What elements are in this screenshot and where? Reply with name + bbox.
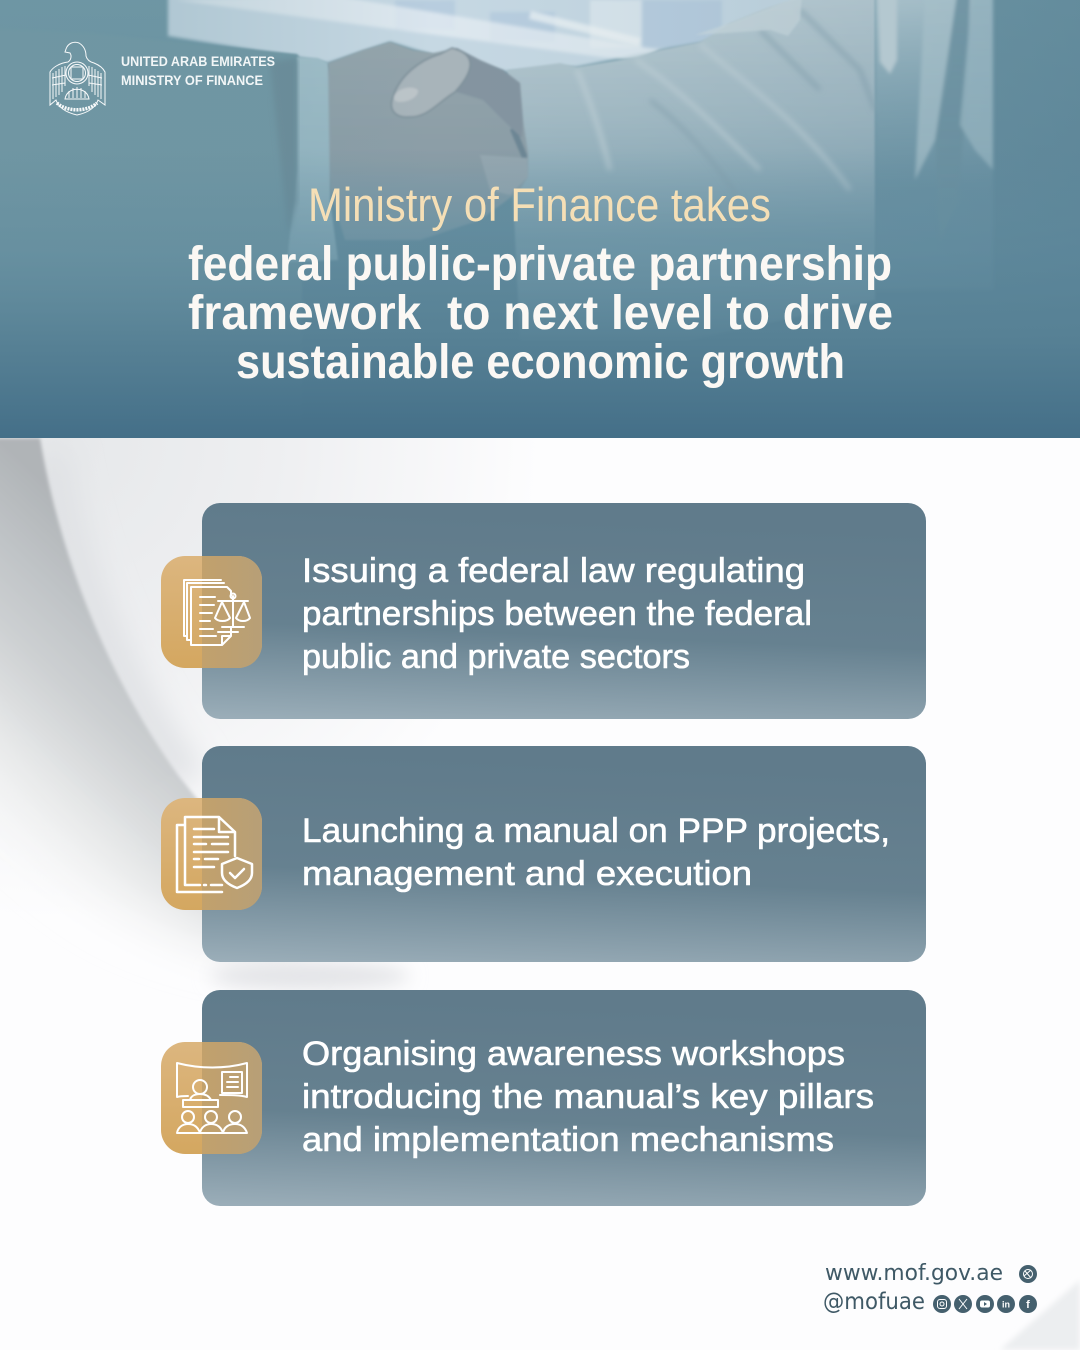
footer: website and handle: www.mof.gov.ae [825, 1261, 1003, 1286]
title: federal public-private partnership [188, 238, 892, 291]
panel: federal law [202, 503, 926, 719]
text: federal law: partnerships between the federal [302, 595, 812, 633]
title: Ministry of Finance takes [308, 178, 771, 231]
right robe [507, 0, 876, 297]
panel: manual [202, 746, 926, 962]
logo text [121, 54, 275, 88]
hands [328, 42, 528, 240]
icon: document with shield [161, 798, 262, 910]
logo: UAE emblem [50, 42, 105, 115]
text: workshops: and implementation mechanisms [302, 1121, 834, 1159]
footer: website and handle [823, 1261, 1003, 1315]
text: federal law: Issuing a federal law regulating [302, 552, 805, 590]
sky window [168, 0, 820, 72]
text: manual: management and execution [302, 855, 752, 893]
logo text: MINISTRY OF FINANCE [121, 73, 263, 88]
text: federal law: public and private sectors [302, 638, 690, 676]
icon: document with scales [161, 556, 262, 668]
right curtain [874, 0, 994, 182]
text: workshops: introducing the manual’s key pillars [302, 1078, 874, 1116]
text: workshops: Organising awareness workshops [302, 1035, 845, 1073]
footer: website and handle: @mofuae [823, 1289, 925, 1315]
social icons: f [1026, 1299, 1030, 1311]
logo text: UNITED ARAB EMIRATES [121, 54, 275, 69]
panel: workshops [202, 990, 926, 1206]
hero photo: handshake [0, 0, 1080, 438]
title [188, 178, 893, 389]
text: manual [302, 812, 890, 893]
social icons: in [1002, 1300, 1010, 1310]
social icons [933, 1265, 1037, 1313]
title: sustainable economic growth [236, 336, 845, 389]
text: federal law [302, 552, 812, 676]
title: framework to next level to drive [188, 287, 893, 340]
icon: workshop presenter [161, 1042, 262, 1154]
left sleeve [227, 46, 338, 263]
text: workshops [302, 1035, 874, 1159]
page background with grey swoosh [0, 400, 1080, 1350]
text: manual: Launching a manual on PPP projects, [302, 812, 890, 850]
